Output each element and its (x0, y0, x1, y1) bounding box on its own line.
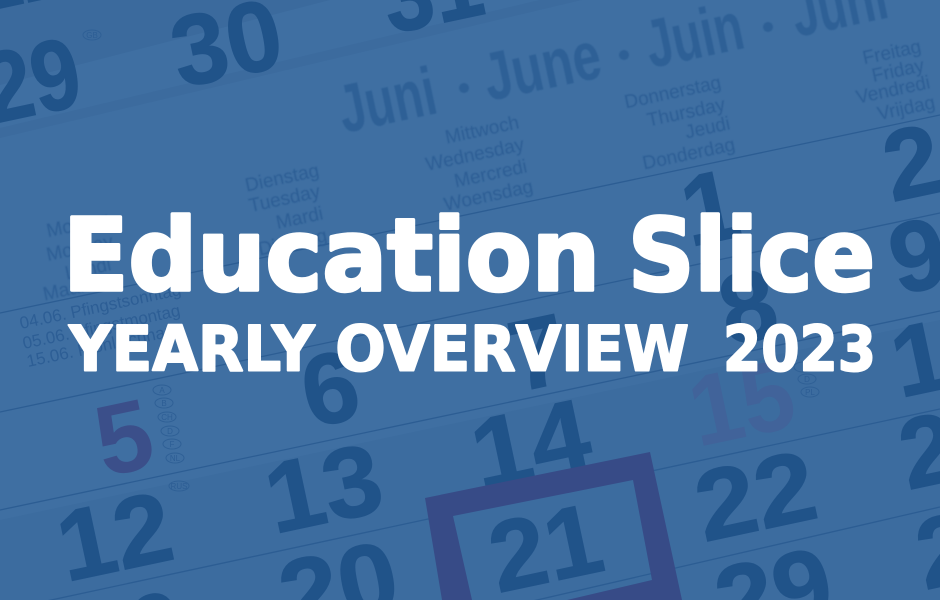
holiday notes: 05.06. Pfingstmontag (21, 301, 182, 353)
date numbers: 13 (255, 422, 392, 556)
date numbers: 7 (499, 292, 577, 414)
weekday column: Monday: Montag (45, 208, 111, 242)
holiday notes: 04.06. Pfingstsonntag (18, 280, 183, 333)
date numbers: 6 (291, 328, 369, 450)
region badges: RUS (171, 482, 187, 491)
date numbers: 1 (671, 147, 749, 269)
holiday notes: 15.06. Fronleichnam (25, 320, 180, 371)
weekday column: Friday (856, 42, 935, 120)
region badges: D (804, 375, 810, 384)
title: Education Slice (63, 197, 875, 314)
weekday column: Monday: Monday (45, 231, 116, 266)
weekday column: Monday: Lundi (63, 254, 113, 285)
weekday column: Thursday: Donderdag (641, 134, 737, 174)
weekday column: Wednesday: Wednesday (424, 134, 527, 176)
region badges (83, 30, 819, 491)
weekday column: Friday: Freitag (861, 36, 923, 69)
month heading: Juni June Juin Juni: June (476, 17, 608, 116)
date numbers: 14 (461, 377, 600, 512)
weekday column: Tuesday: Tuesday (247, 181, 323, 217)
month heading: Juni June Juin Juni: Juni (331, 53, 443, 148)
weekday column: Tuesday: Dinsdag (256, 225, 329, 260)
purple highlight frame around 21 (425, 452, 682, 600)
weekday column: Thursday: Jeudi (683, 113, 732, 143)
title: Education Slice: Slice (628, 197, 875, 314)
region badges: A (159, 386, 165, 395)
region badges: B (161, 399, 167, 408)
date numbers: 22 (685, 429, 826, 564)
date numbers: 8 (709, 246, 787, 368)
holiday date numbers in purple (97, 360, 793, 474)
weekday column: Wednesday: Woensdag (442, 176, 535, 216)
region badges: D (167, 427, 173, 436)
weekday column: Monday: Maandag (41, 268, 123, 305)
date numbers: 12 (47, 470, 182, 600)
weekday column: Friday: Friday (870, 55, 927, 87)
weekday column: Thursday (624, 78, 735, 169)
weekday column: Friday: Vendredi (854, 72, 932, 108)
weekday column: Wednesday: Mercredi (452, 156, 529, 192)
subtitle: Yearly Overview 2023: 2023 (723, 312, 876, 386)
weekday column: Monday (44, 214, 112, 300)
weekday column: Tuesday: Mardi (274, 203, 325, 234)
region badges: PL (805, 388, 815, 397)
weekday column: Wednesday (425, 116, 533, 210)
weekday column: Tuesday: Dienstag (243, 160, 321, 196)
weekday column: Wednesday: Mittwoch (443, 112, 521, 148)
region badges: NL (170, 454, 181, 463)
month heading: Juni June Juin Juni (342, 0, 888, 132)
weekday column: Friday: Vrijdag (875, 92, 937, 125)
holiday date numbers in purple: 15 (679, 337, 804, 469)
holiday date numbers in purple: 5 (85, 377, 163, 499)
region badges: GB (86, 31, 98, 40)
region badges: CH (161, 413, 173, 422)
weekday column: Tuesday (246, 166, 327, 255)
subtitle: Yearly Overview 2023: YEARLY OVERVIEW (68, 312, 689, 386)
region badges: F (170, 440, 175, 449)
title: Education Slice: Education (63, 197, 600, 314)
weekday labels (41, 36, 937, 305)
weekday column: Thursday: Thursday (645, 94, 728, 131)
weekday column: Thursday: Donnerstag (623, 72, 723, 113)
holiday notes (20, 289, 181, 366)
